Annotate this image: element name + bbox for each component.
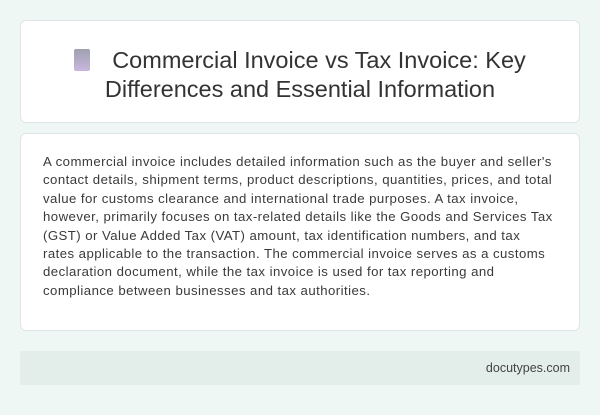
description text: rates applicable to the transaction. The commercial invoice serves as a customs: [43, 246, 545, 261]
title: Commercial Invoice vs Tax Invoice: Key: [112, 47, 526, 73]
description text: A commercial invoice includes detailed information such as the buyer and seller's: [43, 154, 552, 169]
description text: contact details, shipment terms, product descriptions, quantities, prices, and total: [43, 172, 552, 187]
body text panel: [20, 133, 580, 331]
description text: value for customs clearance and international trade purposes. A tax invoice,: [43, 191, 519, 206]
icon: invoice receipt: [74, 49, 90, 71]
title: Differences and Essential Information: [105, 76, 495, 102]
title: [74, 47, 526, 102]
header panel: [20, 20, 580, 123]
description text: [43, 154, 553, 298]
footer: [20, 351, 580, 385]
description text: (GST) or Value Added Tax (VAT) amount, tax identification numbers, and tax: [43, 228, 520, 243]
description text: however, primarily focuses on tax-related details like the Goods and Services Tax: [43, 209, 553, 224]
description text: compliance between businesses and tax authorities.: [43, 283, 370, 298]
description text: declaration document, while the tax invoice is used for tax reporting and: [43, 264, 494, 279]
footer source text: docutypes.com: [486, 361, 570, 375]
